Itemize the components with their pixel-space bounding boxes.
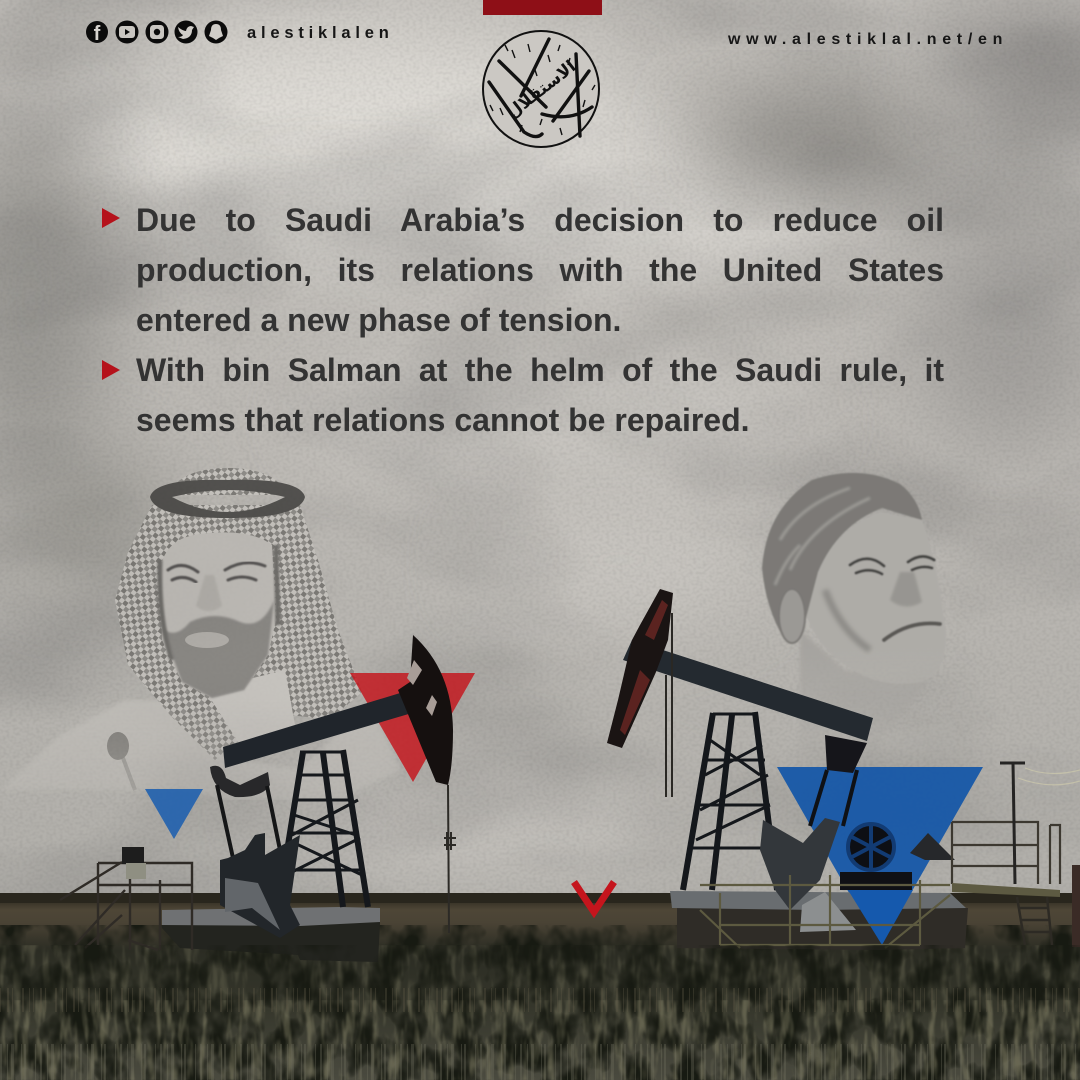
social icons xyxy=(86,20,228,45)
neck and collar xyxy=(205,670,295,745)
pitman rods xyxy=(217,785,281,858)
concrete deck xyxy=(670,891,966,910)
pitman rods xyxy=(810,770,857,826)
neck xyxy=(800,634,898,700)
walking beam xyxy=(623,640,873,741)
control box xyxy=(122,847,144,864)
light plate xyxy=(800,892,856,932)
triangle: blue small xyxy=(145,789,203,839)
robe xyxy=(0,700,400,800)
icon: snapchat xyxy=(204,20,228,44)
ear xyxy=(779,589,805,643)
logo wordmark: الاستقلال xyxy=(503,57,580,123)
paragraph two xyxy=(136,352,944,438)
mouth xyxy=(884,623,940,640)
website: www.alestiklal.net/en xyxy=(727,31,1008,48)
horsehead xyxy=(607,589,673,748)
right platform railing xyxy=(952,822,1060,884)
logo strokes xyxy=(489,39,592,137)
bit head xyxy=(825,735,867,773)
equalizer yoke xyxy=(210,766,270,797)
icon: twitter xyxy=(174,20,198,44)
bullet one xyxy=(102,208,120,228)
stairs xyxy=(1017,897,1052,945)
microphone head xyxy=(107,732,129,760)
icon: instagram xyxy=(146,20,168,44)
platform deck xyxy=(952,883,1060,897)
ground: grass field xyxy=(0,893,1080,1080)
icon: youtube xyxy=(116,20,138,44)
nose xyxy=(890,572,922,607)
horsehead tint xyxy=(620,600,668,735)
hair xyxy=(762,473,922,640)
gearbox and counterweights xyxy=(760,818,840,910)
horsehead xyxy=(398,635,453,785)
nose xyxy=(196,575,222,611)
tower xyxy=(278,750,368,907)
triangle: blue large xyxy=(777,767,983,947)
line: production, its relations with the United States xyxy=(136,252,944,288)
platform base xyxy=(162,908,380,962)
utility pole xyxy=(1000,763,1025,884)
scarf crown xyxy=(178,468,278,495)
lapel microphone stem xyxy=(122,757,136,790)
crank and counterweight xyxy=(220,833,300,938)
beard xyxy=(162,600,274,698)
scarf shadow edge xyxy=(160,545,278,660)
logo marks xyxy=(490,44,595,135)
eyes xyxy=(850,556,934,574)
cheek shadow xyxy=(825,590,870,650)
lips xyxy=(185,632,229,648)
triangle: red left xyxy=(350,673,475,782)
portrait: Joe Biden xyxy=(762,472,945,700)
horsehead window xyxy=(407,660,437,716)
gearbox base xyxy=(840,872,912,890)
line: entered a new phase of tension. xyxy=(136,302,621,338)
tower xyxy=(683,712,777,890)
sign xyxy=(126,863,146,879)
oil pump: left xyxy=(60,635,456,962)
line: Due to Saudi Arabia’s decision to reduce oil xyxy=(136,202,944,238)
igal head rope xyxy=(150,480,305,518)
line: With bin Salman at the helm of the Saudi rule, it xyxy=(136,352,944,388)
right counterweight xyxy=(910,833,955,860)
bullet two xyxy=(102,360,120,380)
yellow railing xyxy=(700,875,950,948)
cable and hanger xyxy=(444,785,456,933)
headscarf xyxy=(115,505,362,760)
post xyxy=(1072,865,1080,947)
cables xyxy=(666,613,672,797)
blue overlap xyxy=(848,890,913,945)
hair highlights xyxy=(775,488,870,585)
shirt xyxy=(880,720,975,770)
walking beam xyxy=(223,690,412,768)
eyes and brows xyxy=(168,563,265,582)
concrete deck xyxy=(162,907,380,926)
flywheel xyxy=(848,824,894,870)
oil pump: right xyxy=(607,589,1080,950)
chevron: red xyxy=(574,882,614,912)
line: seems that relations cannot be repaired. xyxy=(136,402,750,438)
left railing and stairs xyxy=(60,862,192,950)
power lines xyxy=(1018,768,1080,785)
crank highlights xyxy=(225,878,280,930)
foreground grass xyxy=(0,945,1080,1080)
portrait: Mohammed bin Salman xyxy=(0,468,400,800)
icon: facebook xyxy=(86,21,108,45)
logo: calligraphic roundel xyxy=(483,31,599,147)
red top tab xyxy=(483,0,602,15)
face xyxy=(160,532,276,698)
social handle: alestiklalen xyxy=(247,24,394,42)
icon: facebook: f xyxy=(94,23,101,45)
paragraph one xyxy=(136,202,944,338)
foundation xyxy=(677,908,968,950)
face xyxy=(809,516,945,658)
